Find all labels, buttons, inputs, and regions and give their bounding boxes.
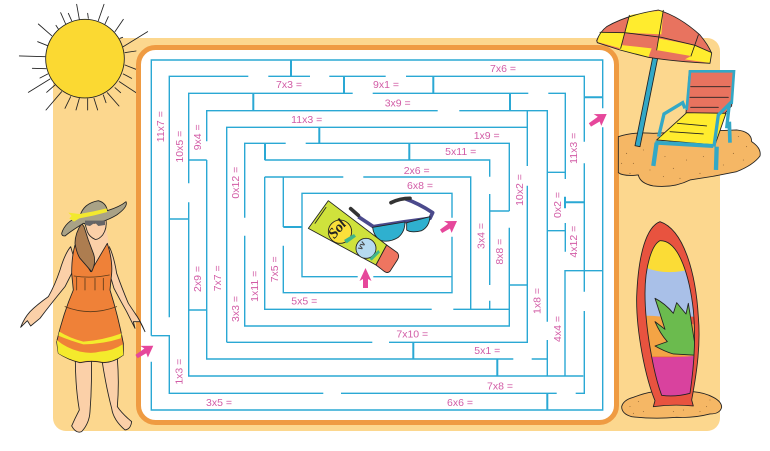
label: 7x6: 7x6 =	[490, 63, 516, 75]
icon: sunscreen tube: vv	[355, 239, 368, 252]
icon: surfboard on sand	[622, 222, 722, 418]
label: 1x8: 1x8 =	[532, 288, 544, 314]
icon: beach chair	[653, 71, 734, 170]
label: 2x6: 2x6 =	[404, 165, 430, 177]
labels: multiplication sums	[155, 63, 580, 409]
label: 5x11: 5x11 =	[445, 146, 476, 158]
label: 11x7: 11x7 =	[155, 111, 167, 142]
label: 11x3 top: 11x3 =	[291, 114, 322, 126]
icon: sun	[19, 4, 148, 110]
icon: sand mound	[618, 130, 760, 186]
label: 6x8: 6x8 =	[407, 180, 433, 192]
icon: umbrella pole	[635, 49, 659, 147]
label: 10x2: 10x2 =	[514, 174, 526, 206]
label: 4x12: 4x12 =	[568, 226, 580, 258]
label: 7x3: 7x3 =	[276, 79, 302, 91]
label: 8x8: 8x8 =	[494, 239, 506, 265]
chart: maze walls	[151, 60, 603, 410]
icon: sunscreen and sunglasses	[308, 198, 433, 273]
panel: maze frame	[138, 48, 616, 422]
label: 7x5: 7x5 =	[269, 256, 281, 282]
icon: sunscreen tube: Sol	[325, 216, 351, 242]
arrow: centre right	[437, 215, 461, 237]
label: 6x6: 6x6 =	[447, 397, 473, 409]
arrow: start of maze	[133, 340, 157, 362]
icon: sunscreen tube	[308, 201, 399, 273]
arrow: centre up	[360, 268, 372, 288]
label: 1x11: 1x11 =	[249, 271, 261, 302]
icon: beach umbrella and chair on sand	[597, 10, 760, 186]
label: 2x9: 2x9 =	[192, 266, 204, 292]
label: 10x5: 10x5 =	[174, 131, 186, 163]
label: 3x5: 3x5 =	[206, 397, 232, 409]
icon: woman in dress and hat	[21, 201, 145, 432]
icon: umbrella canopy	[597, 10, 712, 63]
panel: sand coloured background	[53, 38, 720, 431]
label: 3x9: 3x9 =	[385, 98, 411, 110]
label: 1x3: 1x3 =	[174, 359, 186, 385]
label: 9x4: 9x4 =	[192, 124, 204, 150]
label: 7x7: 7x7 =	[212, 265, 224, 291]
label: 0x2: 0x2 =	[552, 192, 564, 218]
label: 5x5: 5x5 =	[291, 296, 317, 308]
label: 3x3: 3x3 =	[230, 296, 242, 322]
icon: sunglasses	[351, 198, 433, 241]
label: 11x3 right: 11x3 =	[568, 133, 580, 164]
arrow: right exit	[586, 108, 611, 131]
label: 1x9: 1x9 =	[474, 130, 500, 142]
label: 9x1: 9x1 =	[373, 79, 399, 91]
label: 7x8: 7x8 =	[487, 380, 513, 392]
label: 3x4: 3x4 =	[476, 223, 488, 249]
label: 7x10: 7x10 =	[396, 328, 428, 340]
label: 0x12: 0x12 =	[230, 167, 242, 199]
label: 4x4: 4x4 =	[552, 316, 564, 342]
label: 5x1: 5x1 =	[474, 345, 500, 357]
